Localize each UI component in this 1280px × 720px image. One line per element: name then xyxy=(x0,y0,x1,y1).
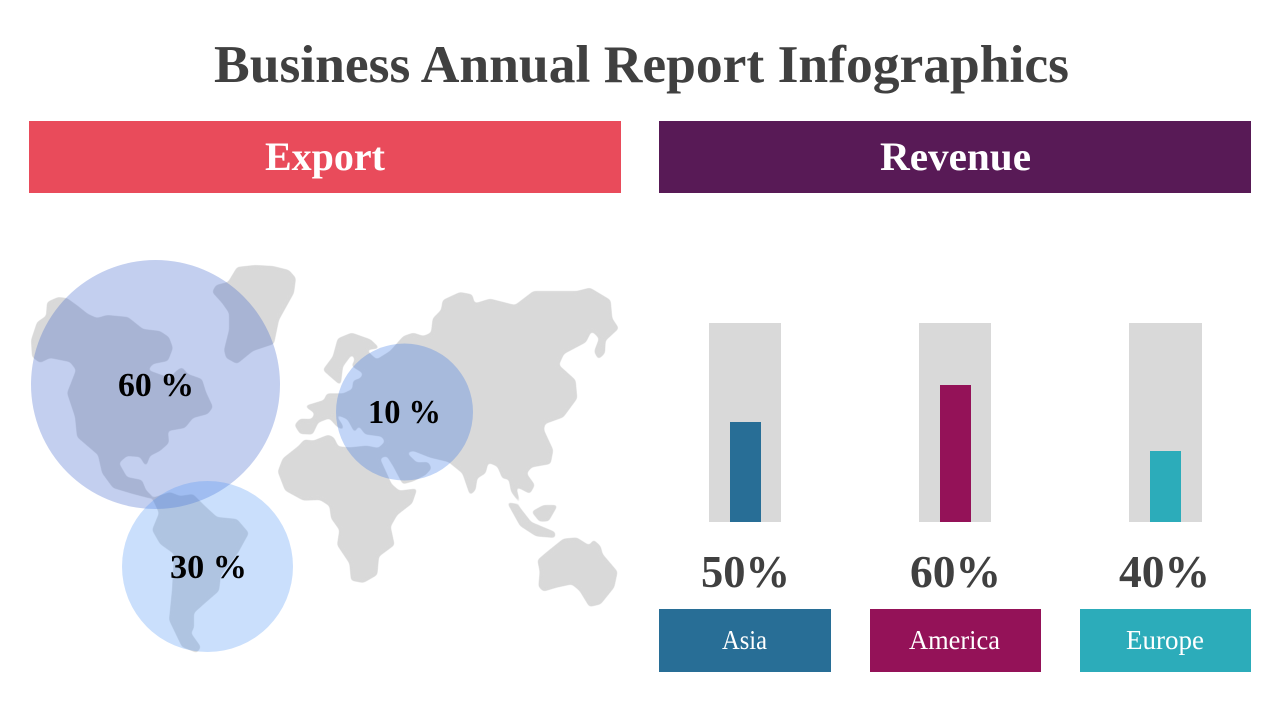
map: South America xyxy=(152,492,249,653)
title: Business Annual Report Infographics xyxy=(214,36,1069,94)
map: Borneo xyxy=(531,505,558,522)
value: Asia 50%: 50% xyxy=(701,546,790,597)
bubble: 10 percent: 10 % xyxy=(368,394,441,431)
bubble: 30 percent xyxy=(122,481,293,652)
map: Australia xyxy=(537,537,618,607)
world map xyxy=(31,265,619,653)
label: Europe: Europe xyxy=(1126,625,1204,655)
value: Europe 40%: 40% xyxy=(1119,546,1210,597)
map: Sumatra and Java xyxy=(507,502,555,538)
label: Asia: Asia xyxy=(722,625,767,655)
label: America xyxy=(870,609,1041,672)
value: America 60%: 60% xyxy=(910,546,1001,597)
panel: revenue xyxy=(659,121,1251,672)
map: Greenland xyxy=(212,265,296,364)
map: Eurasia and Africa xyxy=(278,288,619,583)
bubble: 30 percent: 30 % xyxy=(170,549,247,586)
bubble: 60 percent: 60 % xyxy=(118,367,194,404)
bar: Europe xyxy=(1129,323,1202,522)
panel: export xyxy=(29,121,621,653)
bubble: 10 percent xyxy=(336,344,473,480)
map: North America xyxy=(31,297,213,500)
export header bar xyxy=(29,121,621,193)
revenue header bar xyxy=(659,121,1251,193)
label: America: America xyxy=(909,625,1000,655)
label: Europe xyxy=(1080,609,1251,672)
export heading: Export xyxy=(265,134,386,179)
bar: Asia xyxy=(709,323,781,522)
bubble: 60 percent xyxy=(31,260,280,509)
label: Asia xyxy=(659,609,831,672)
revenue heading: Revenue xyxy=(880,134,1031,179)
bar: America xyxy=(919,323,991,522)
